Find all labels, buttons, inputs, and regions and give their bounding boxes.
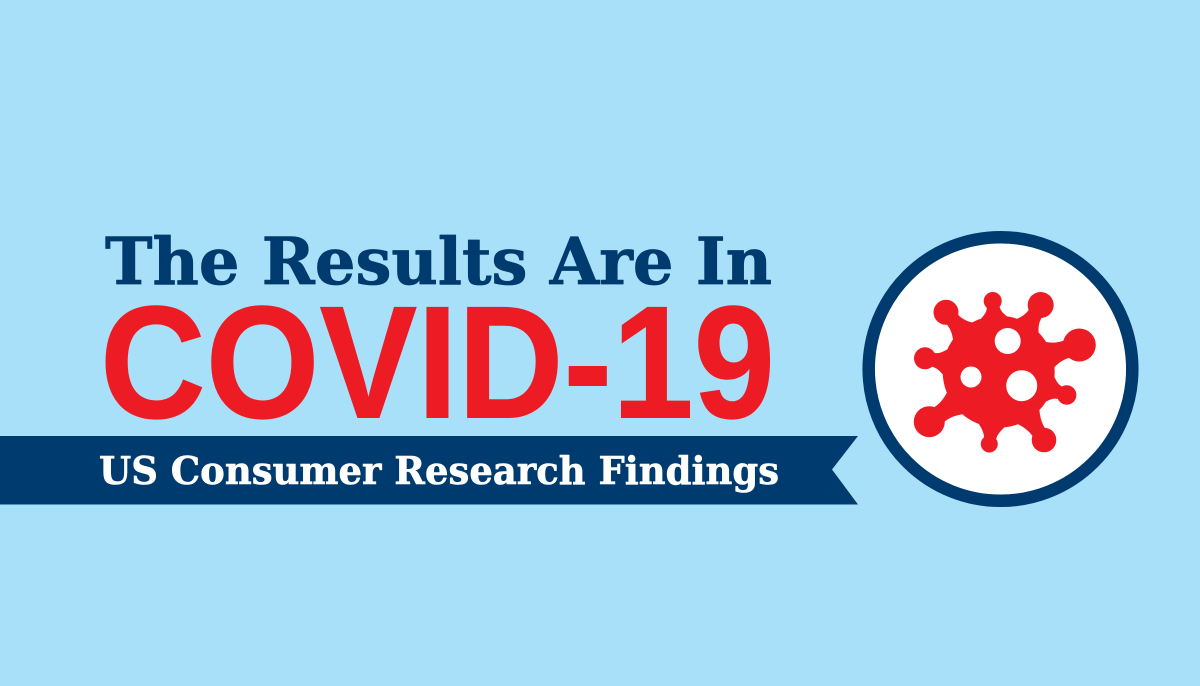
heading: COVID-19: COVID-19 — [100, 272, 775, 452]
icon: virus in circle — [869, 237, 1132, 501]
ribbon banner — [0, 436, 858, 504]
virus — [914, 292, 1096, 452]
circle badge — [869, 237, 1132, 501]
title: The Results Are In: The Results Are In — [105, 224, 772, 300]
subtitle: US Consumer Research Findings: US Consumer Research Findings — [99, 448, 779, 493]
